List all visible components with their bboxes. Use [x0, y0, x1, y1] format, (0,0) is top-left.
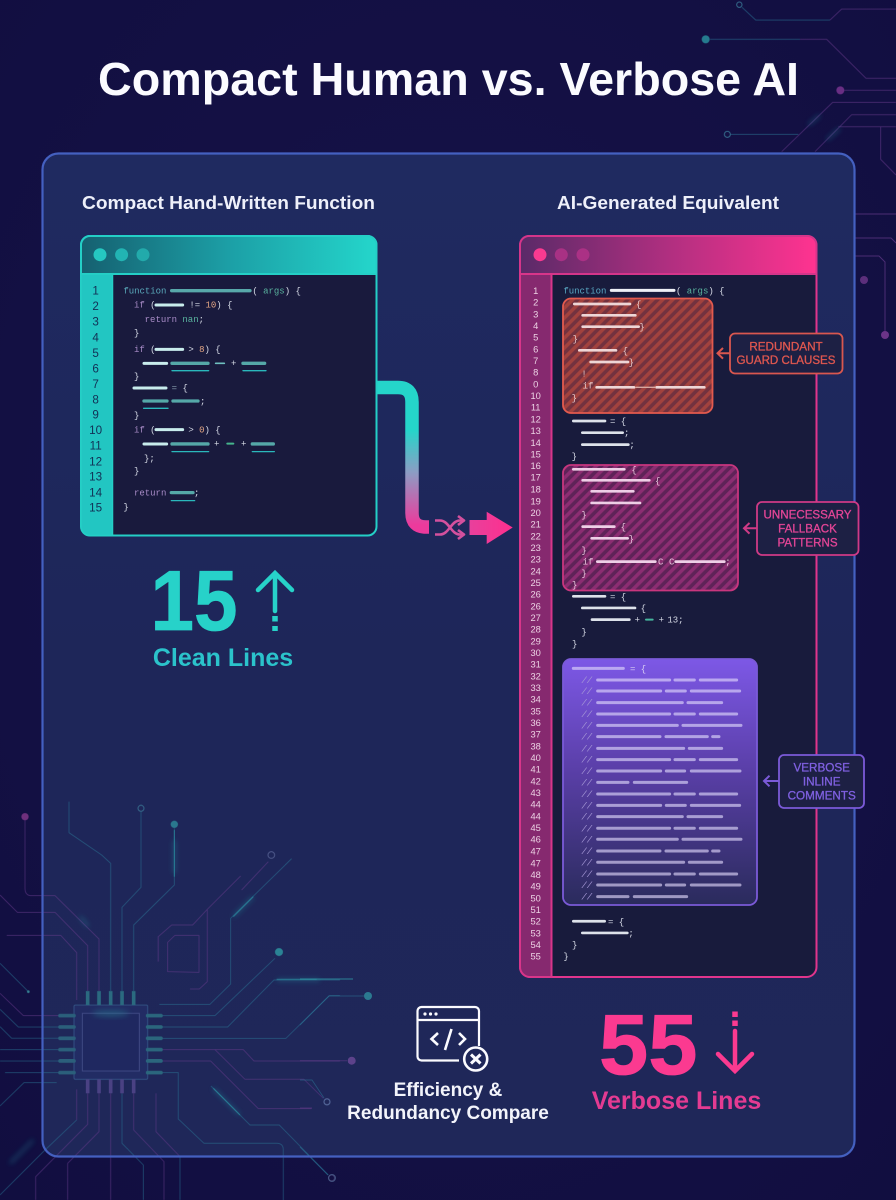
code text: } — [572, 639, 577, 649]
comment slashes: // — [581, 733, 593, 743]
code text: > 8) { — [188, 345, 221, 355]
code text: } — [629, 358, 634, 368]
redacted identifier bars — [134, 291, 274, 501]
callout: verbose inline comments: VERBOSE — [793, 762, 850, 775]
code text: ( args) { — [252, 286, 301, 296]
code text — [123, 286, 301, 513]
block: verbose inline comments — [563, 659, 757, 905]
line numbers: 18 — [530, 485, 541, 495]
comment slashes: // — [581, 893, 593, 903]
code text: return nan; — [145, 315, 204, 325]
stat: 15 clean lines — [150, 554, 293, 672]
line numbers: 2 — [533, 298, 538, 308]
block: unnecessary fallback patterns — [563, 465, 738, 590]
code text: { — [623, 346, 628, 356]
code text: + — [241, 440, 246, 450]
code text: C — [658, 558, 664, 568]
line numbers: 15 — [89, 502, 102, 515]
callout: unnecessary fallback patterns: FALLBACK — [778, 522, 837, 536]
heading: AI-generated equivalent: AI-Generated Equivalent — [557, 193, 779, 213]
code text: } — [134, 372, 139, 382]
comment slashes: // — [581, 744, 593, 754]
code text: } — [134, 467, 139, 477]
redacted identifier bars — [573, 290, 724, 933]
code text: { — [631, 465, 637, 475]
line numbers: 11 — [90, 440, 102, 453]
line numbers: 2 — [92, 300, 99, 313]
block: redundant guard clauses — [563, 298, 712, 413]
line numbers: 3 — [92, 316, 99, 329]
code text: C — [669, 558, 675, 568]
line numbers: 29 — [530, 636, 541, 646]
line numbers: 50 — [530, 893, 541, 903]
line numbers: 5 — [533, 333, 538, 343]
code text: = { — [608, 917, 624, 927]
line numbers: 13 — [530, 426, 541, 436]
line numbers: 12 — [89, 455, 102, 468]
line numbers: 52 — [530, 917, 541, 927]
callout: verbose inline comments: COMMENTS — [788, 790, 856, 803]
code text: { — [641, 604, 646, 614]
line numbers: 26 — [530, 601, 541, 611]
line numbers: 20 — [530, 508, 541, 518]
line numbers: 25 — [530, 578, 541, 588]
code text: + — [659, 616, 664, 626]
line numbers: 28 — [530, 625, 541, 635]
line numbers: 31 — [530, 660, 541, 670]
panel border — [42, 154, 854, 1156]
code text: + — [214, 440, 219, 450]
comment slashes: // — [581, 790, 593, 800]
line numbers: 14 — [89, 486, 103, 499]
circuit traces: right margin — [855, 214, 896, 339]
code text: ; — [629, 441, 635, 451]
line numbers: 27 — [530, 613, 541, 623]
title: Compact Human vs. Verbose AI — [98, 53, 799, 105]
stat: 15 clean lines: 15 — [150, 554, 238, 649]
window dots — [94, 248, 150, 261]
line numbers: 16 — [530, 461, 541, 471]
comment slashes: // — [581, 870, 593, 880]
code text: 13; — [667, 616, 684, 626]
line numbers: 9 — [92, 409, 99, 422]
line numbers: 32 — [530, 671, 541, 681]
line numbers: 41 — [530, 765, 541, 775]
circuit traces: lower middle — [300, 979, 372, 1182]
caption: efficiency and redundancy compare: Redundancy Compare — [347, 1103, 549, 1124]
arrow — [764, 776, 779, 786]
line numbers: 3 — [533, 309, 538, 319]
code text: } — [123, 503, 129, 513]
code text: } — [572, 452, 577, 462]
line numbers: 14 — [530, 438, 541, 448]
line numbers: 30 — [530, 648, 541, 658]
circuit traces: top right — [702, 2, 896, 175]
code text: = { — [610, 592, 626, 602]
callout: redundant guard clauses: GUARD CLAUSES — [736, 354, 836, 367]
line numbers: 49 — [530, 882, 541, 892]
caption: efficiency and redundancy compare: Efficiency & — [394, 1080, 503, 1101]
stat: 55 verbose lines: Verbose Lines — [592, 1087, 761, 1115]
comment slashes: // — [581, 847, 593, 857]
stat: 55 verbose lines: 55 — [599, 998, 698, 1093]
code text: + — [635, 616, 640, 626]
code text: } — [629, 534, 634, 544]
line numbers: 24 — [530, 566, 541, 576]
line numbers: 48 — [530, 870, 541, 880]
line numbers: 47 — [530, 847, 541, 857]
line numbers: 36 — [530, 718, 541, 728]
code text: } — [572, 580, 577, 590]
code text: } — [581, 627, 587, 637]
code text: != 10) { — [189, 301, 232, 311]
line numbers: 53 — [530, 928, 541, 938]
code text: if ( — [134, 345, 156, 355]
line numbers: 12 — [530, 414, 541, 424]
line numbers: 1 — [92, 285, 99, 298]
comment slashes: // — [581, 801, 593, 811]
code text: ( args) { — [676, 286, 725, 296]
line numbers: 38 — [530, 741, 541, 751]
comment slashes: // — [581, 858, 593, 868]
line numbers: 34 — [530, 695, 541, 705]
code text: } — [581, 569, 587, 579]
line numbers: 42 — [530, 776, 541, 786]
stat: 15 clean lines: Clean Lines — [153, 644, 293, 672]
chip — [60, 991, 161, 1093]
line numbers: 37 — [530, 730, 541, 740]
comment text bars — [573, 668, 741, 897]
comment slashes: // — [581, 824, 593, 834]
icon: code window with error badge — [418, 1007, 487, 1070]
line numbers: 4 — [92, 332, 99, 345]
code text: { — [636, 300, 641, 310]
line numbers: 35 — [530, 706, 541, 716]
arrow — [718, 348, 730, 359]
line numbers: 45 — [530, 823, 541, 833]
callout: verbose inline comments: INLINE — [803, 776, 841, 789]
heading: compact hand-written function: Compact Hand-Written Function — [82, 193, 375, 213]
line numbers: 10 — [530, 391, 541, 401]
panel: compact code window — [81, 236, 376, 536]
line numbers: 6 — [92, 362, 99, 375]
code text: } — [572, 394, 577, 404]
line numbers: 0 — [533, 379, 538, 389]
line numbers: 7 — [92, 378, 99, 391]
line numbers: 51 — [530, 905, 541, 915]
panel: main comparison card background — [42, 154, 854, 1156]
comment slashes: // — [581, 835, 593, 845]
comment slashes: // — [581, 756, 593, 766]
comment slashes: // — [581, 813, 593, 823]
callout: unnecessary fallback patterns — [744, 502, 858, 555]
comment slashes: // — [581, 721, 593, 731]
line numbers: 44 — [530, 800, 541, 810]
callout: redundant guard clauses: REDUNDANT — [749, 340, 823, 354]
code text: ; — [628, 929, 634, 939]
window dots — [534, 248, 590, 261]
callout: unnecessary fallback patterns: PATTERNS — [777, 536, 838, 550]
comment slashes: // — [581, 778, 593, 788]
code text: ; — [194, 489, 199, 499]
line numbers: 7 — [533, 356, 538, 366]
code text — [563, 286, 731, 962]
code text: function — [123, 286, 166, 296]
code text: return — [134, 489, 166, 499]
code text: if ( — [134, 425, 156, 435]
line numbers: 4 — [533, 321, 538, 331]
code text: if — [583, 382, 593, 392]
line numbers: 44 — [530, 811, 541, 821]
line numbers: 11 — [531, 403, 541, 413]
line numbers: 33 — [530, 683, 541, 693]
code text: = { — [172, 384, 188, 394]
code text: } — [581, 511, 587, 521]
comment slashes: // — [581, 710, 593, 720]
panel: AI code window — [520, 236, 816, 977]
icon: right arrow — [470, 512, 513, 544]
callout: redundant guard clauses — [718, 334, 842, 374]
line numbers: 10 — [89, 424, 103, 437]
line numbers: 26 — [530, 590, 541, 600]
comment slashes: // — [581, 881, 593, 891]
code text: ! — [581, 370, 587, 380]
code text: if ( — [134, 301, 156, 311]
code text: } — [134, 329, 139, 339]
code text: } — [134, 411, 139, 421]
callout: unnecessary fallback patterns: UNNECESSARY — [763, 508, 852, 522]
stat: 55 verbose lines — [592, 998, 761, 1115]
icon: down arrow — [718, 1012, 752, 1071]
code text: = { — [610, 417, 626, 427]
code text: { — [655, 476, 660, 486]
circuit board illustration with chip — [0, 802, 340, 1200]
code text: ; — [200, 397, 205, 407]
line numbers: 17 — [530, 473, 541, 483]
line numbers: 8 — [92, 393, 99, 406]
code text: } — [572, 941, 577, 951]
traces — [0, 802, 340, 1200]
code text: } — [639, 323, 645, 333]
line numbers: 23 — [530, 543, 541, 553]
code text: } — [573, 334, 578, 344]
callout: verbose inline comments — [764, 755, 864, 808]
icon: up arrow — [258, 573, 292, 631]
line numbers: 47 — [530, 858, 541, 868]
line numbers: 40 — [530, 753, 541, 763]
code text: if — [583, 558, 593, 568]
arrow — [744, 523, 757, 534]
comment slashes: // — [581, 767, 593, 777]
code text: = { — [630, 664, 646, 674]
line numbers: 54 — [530, 940, 541, 950]
comment slashes: // — [581, 699, 593, 709]
line numbers: 21 — [530, 520, 541, 530]
line numbers: 1 — [533, 286, 538, 296]
code text: } — [563, 952, 569, 962]
code text: ; — [725, 558, 731, 568]
code text: > 0) { — [188, 425, 221, 435]
code text: + — [231, 359, 236, 369]
code text: }; — [144, 454, 155, 464]
line numbers: 46 — [530, 835, 541, 845]
code text: ; — [624, 429, 629, 439]
comment slashes: // — [581, 676, 593, 686]
line numbers: 55 — [530, 952, 541, 962]
line numbers: 6 — [533, 344, 538, 354]
comment slashes: // — [581, 687, 593, 697]
code text: function — [563, 286, 606, 296]
line numbers: 22 — [530, 531, 541, 541]
line numbers: 23 — [530, 555, 541, 565]
icon: shuffle — [435, 516, 464, 539]
line numbers: 15 — [530, 449, 541, 459]
code text: { — [621, 523, 626, 533]
line numbers: 19 — [530, 496, 541, 506]
code text: } — [581, 546, 587, 556]
connector arrow from compact window to AI window — [376, 388, 513, 544]
line numbers: 8 — [533, 368, 538, 378]
line numbers: 5 — [92, 347, 99, 360]
line numbers: 13 — [89, 471, 102, 484]
line numbers: 43 — [530, 788, 541, 798]
